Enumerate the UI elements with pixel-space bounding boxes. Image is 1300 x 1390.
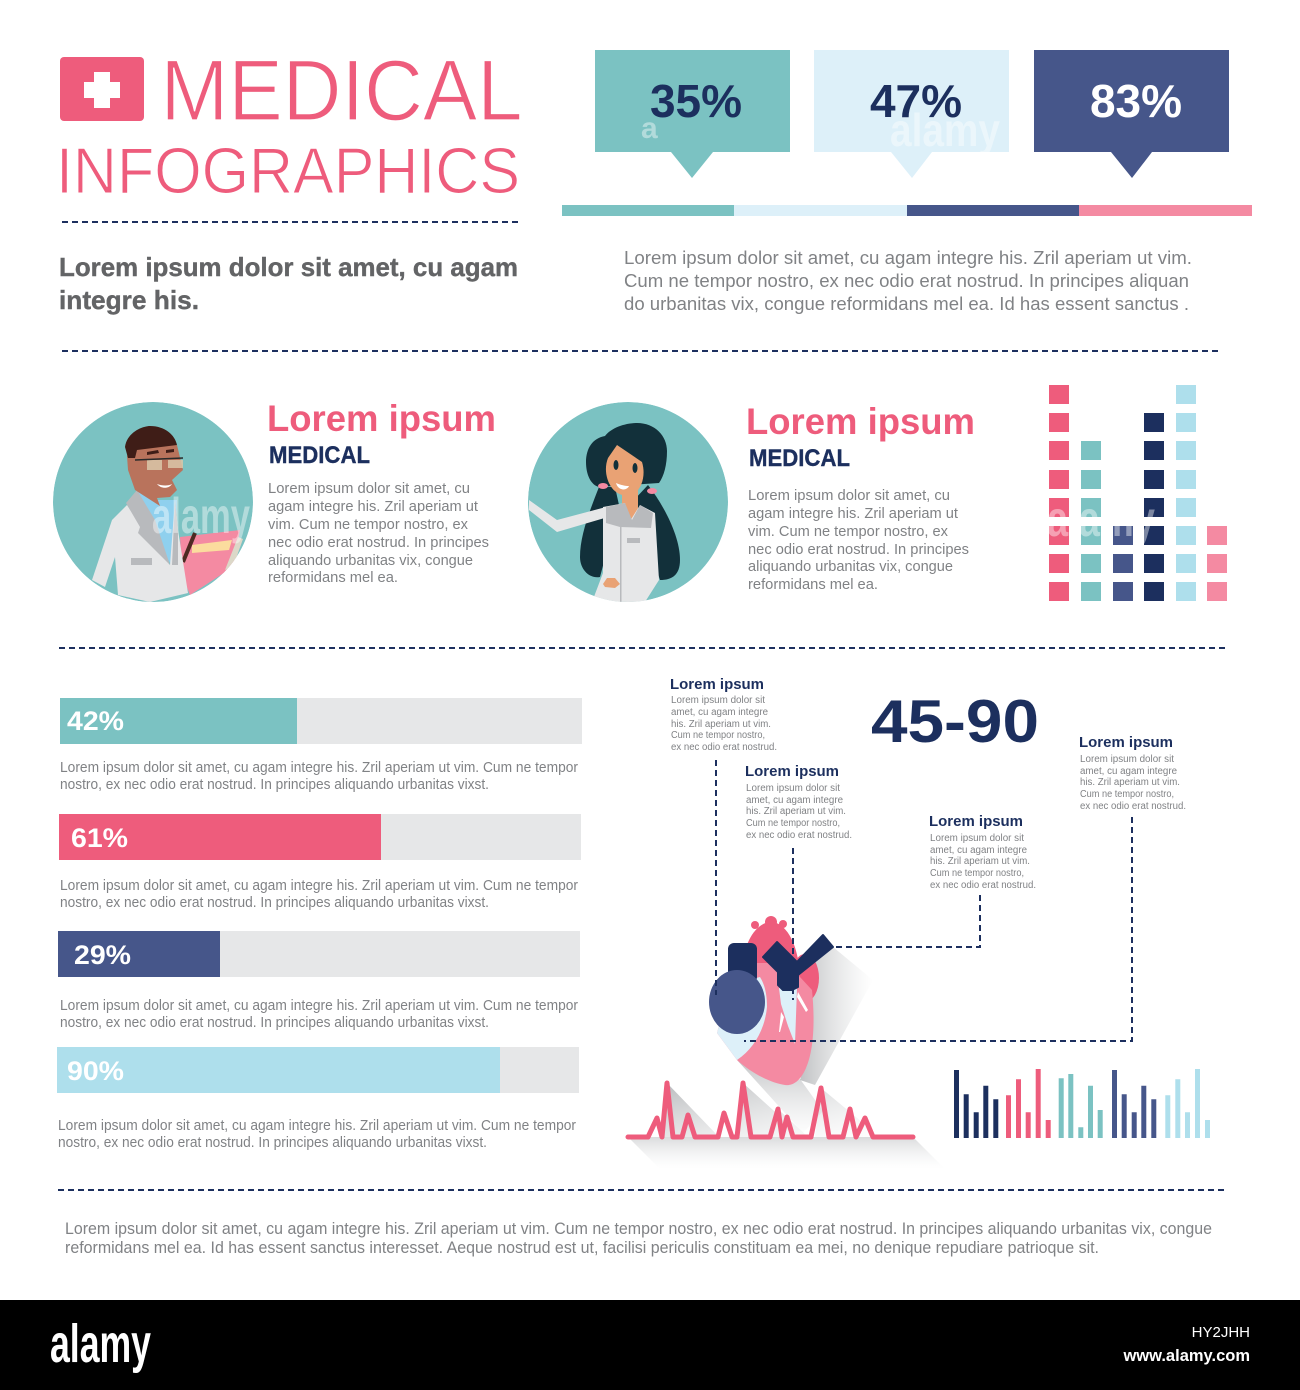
text: doctor one: Lorem ipsum — [267, 398, 496, 439]
footer bar — [0, 1300, 1300, 1390]
intro paragraph: do urbanitas vix, congue reformidans mel ea. Id has essent sanctus . — [624, 293, 1189, 314]
progress bar: 61%: nostro, ex nec odio erat nostrud. In principes aliquando urbanitas vixst. — [60, 895, 489, 911]
title: INFOGRAPHICS — [56, 134, 520, 207]
annotation three: Lorem ipsum — [929, 814, 1023, 830]
progress bar: 29%: 29% — [74, 940, 131, 970]
annotation one — [670, 677, 777, 753]
annotation three — [929, 814, 1036, 891]
progress bar: 90%: 90% — [67, 1056, 124, 1086]
portrait: male doctor — [53, 402, 253, 602]
footer paragraph: Lorem ipsum dolor sit amet, cu agam integre his. Zril aperiam ut vim. Cum ne tempor nostro, ex nec odio erat nostrud. In principes aliquando urbanitas vix, congue — [65, 1220, 1212, 1238]
annotation two — [745, 764, 852, 841]
annotation three: Lorem ipsum dolor sit — [930, 833, 1024, 844]
text: doctor one — [267, 398, 496, 586]
annotation four: Cum ne tempor nostro, — [1080, 789, 1174, 800]
annotation one: Cum ne tempor nostro, — [671, 730, 765, 741]
intro paragraph: Lorem ipsum dolor sit amet, cu agam integre his. Zril aperiam ut vim. — [624, 247, 1192, 268]
progress bar: 42% — [60, 698, 582, 793]
footer bar: alamy — [50, 1314, 151, 1374]
watermark on portrait: alamy — [152, 488, 250, 544]
text: doctor two — [746, 401, 975, 593]
watermark on block columns: alamy — [1047, 491, 1155, 547]
annotation four: Lorem ipsum — [1079, 735, 1173, 751]
annotation one: amet, cu agam integre — [671, 707, 768, 718]
progress bar: 42%: 42% — [67, 706, 124, 736]
progress bar: 90%: nostro, ex nec odio erat nostrud. In principes aliquando urbanitas vixst. — [58, 1135, 487, 1151]
text: doctor one: aliquando urbanitas vix, congue — [268, 553, 473, 569]
progress bar: 90% — [57, 1047, 579, 1151]
text: doctor two: vim. Cum ne tempor nostro, ex — [748, 524, 949, 540]
annotation two: his. Zril aperiam ut vim. — [746, 806, 846, 817]
callout: 35%: a — [641, 112, 658, 145]
text: doctor one: Lorem ipsum dolor sit amet, cu — [268, 481, 470, 497]
intro paragraph: Cum ne tempor nostro, ex nec odio erat nostrud. In principes aliquan — [624, 270, 1189, 291]
footer bar: HY2JHH — [1192, 1324, 1250, 1341]
text: doctor one: vim. Cum ne tempor nostro, ex — [268, 517, 469, 533]
callout: 35% — [595, 50, 790, 178]
text: doctor one: reformidans mel ea. — [268, 570, 398, 586]
annotation one: ex nec odio erat nostrud. — [671, 742, 777, 753]
annotation four: ex nec odio erat nostrud. — [1080, 801, 1186, 812]
annotation two: Lorem ipsum — [745, 764, 839, 780]
portrait: female doctor — [528, 402, 728, 602]
progress bar: 61% — [59, 814, 581, 911]
annotation four — [1079, 735, 1186, 812]
text: doctor two: aliquando urbanitas vix, congue — [748, 559, 953, 575]
callout: 47%: alamy — [890, 104, 1000, 156]
callout: 35%: 35% — [650, 75, 742, 127]
progress bar: 90%: Lorem ipsum dolor sit amet, cu agam integre his. Zril aperiam ut vim. Cum ne tempor — [58, 1118, 576, 1134]
annotation two: Lorem ipsum dolor sit — [746, 783, 840, 794]
annotation four: Lorem ipsum dolor sit — [1080, 754, 1174, 765]
text: doctor one: agam integre his. Zril aperiam ut — [268, 499, 478, 515]
footer bar: www.alamy.com — [1122, 1347, 1250, 1365]
text: doctor one: nec odio erat nostrud. In principes — [268, 535, 489, 551]
progress bar: 29%: nostro, ex nec odio erat nostrud. In principes aliquando urbanitas vixst. — [60, 1015, 489, 1031]
text: doctor two: Lorem ipsum — [746, 401, 975, 442]
annotation three: amet, cu agam integre — [930, 845, 1027, 856]
big number: 45-90 — [871, 688, 1039, 755]
text: doctor two: agam integre his. Zril aperiam ut — [748, 506, 958, 522]
heart illustration — [709, 916, 873, 1133]
annotation two: ex nec odio erat nostrud. — [746, 830, 852, 841]
icon: medical cross — [60, 57, 144, 121]
annotation three: his. Zril aperiam ut vim. — [930, 856, 1030, 867]
progress bar: 29%: Lorem ipsum dolor sit amet, cu agam integre his. Zril aperiam ut vim. Cum ne tempor — [60, 998, 578, 1014]
chart: block columns — [1049, 385, 1227, 601]
intro paragraph — [624, 247, 1192, 314]
annotation two: amet, cu agam integre — [746, 795, 843, 806]
lead text: Lorem ipsum dolor sit amet, cu agam — [59, 252, 518, 282]
ecg line with shadows — [628, 1083, 945, 1169]
callout: 83% — [1034, 50, 1229, 178]
annotation two: Cum ne tempor nostro, — [746, 818, 840, 829]
callout: 83%: 83% — [1090, 75, 1182, 127]
callout: 47% — [814, 50, 1009, 178]
progress bar: 42%: nostro, ex nec odio erat nostrud. In principes aliquando urbanitas vixst. — [60, 777, 489, 793]
connector lines — [716, 760, 1132, 1041]
text: doctor two: Lorem ipsum dolor sit amet, cu — [748, 488, 950, 504]
footer paragraph — [65, 1220, 1212, 1257]
annotation three: Cum ne tempor nostro, — [930, 868, 1024, 879]
progress bar: 42%: Lorem ipsum dolor sit amet, cu agam integre his. Zril aperiam ut vim. Cum ne tempor — [60, 760, 578, 776]
annotation four: amet, cu agam integre — [1080, 766, 1177, 777]
annotation three: ex nec odio erat nostrud. — [930, 880, 1036, 891]
callout: 47%: 47% — [870, 75, 962, 127]
lead text: integre his. — [59, 285, 199, 315]
annotation one: Lorem ipsum — [670, 677, 764, 693]
annotation one: his. Zril aperiam ut vim. — [671, 719, 771, 730]
progress bar: 61%: Lorem ipsum dolor sit amet, cu agam integre his. Zril aperiam ut vim. Cum ne tempor — [60, 878, 578, 894]
text: doctor two: nec odio erat nostrud. In principes — [748, 542, 969, 558]
lead text — [59, 252, 518, 315]
title: MEDICAL — [160, 43, 522, 139]
text: doctor two: MEDICAL — [749, 445, 850, 472]
text: doctor two: reformidans mel ea. — [748, 577, 878, 593]
colour stripe — [562, 205, 1252, 216]
chart: small bars — [954, 1069, 1210, 1138]
annotation one: Lorem ipsum dolor sit — [671, 695, 765, 706]
annotation four: his. Zril aperiam ut vim. — [1080, 777, 1180, 788]
title — [56, 43, 522, 207]
footer paragraph: reformidans mel ea. Id has essent sanctus interesset. Aeque nostrud est ut, facilisi periculis constituam ea mei, no denique repudiare patrioque sit. — [65, 1239, 1099, 1257]
progress bar: 61%: 61% — [71, 823, 128, 853]
text: doctor one: MEDICAL — [269, 442, 370, 469]
progress bar: 29% — [58, 931, 580, 1031]
